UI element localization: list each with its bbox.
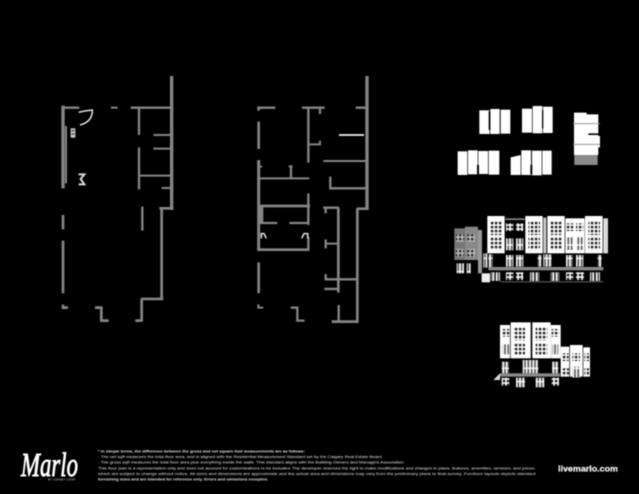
logo — [20, 447, 78, 484]
door swing — [79, 110, 92, 125]
floor plan: right unit — [257, 76, 369, 322]
door swings — [261, 234, 308, 238]
disclaimer text: - The net sqft measures the total floor area, and is aligned with the Residential Measurement Standard set by the Calgary Real Estate Board. — [98, 455, 383, 459]
disclaimer text: which are subject to change without notice. All sizes and dimensions are approximate and the actual area and dimensions may vary from the preliminary plans to final survey. Furniture layouts depicts standard — [98, 472, 536, 476]
large windows — [490, 221, 600, 250]
disclaimer text: - The gross sqft measures the total floor area plus everything inside the walls. This standard aligns with the Building Owners and Managers Association. — [98, 460, 405, 464]
lower windows — [491, 272, 600, 281]
massing: block B — [522, 106, 553, 133]
website url: livemarlo.com — [558, 464, 618, 474]
disclaimer text: This floor plan is a representation only and does not account for customizations to be included. The developer reserves the right to make modifications and changes to plans, features, amenities, services, and prices, — [98, 466, 536, 470]
disclaimer text — [98, 450, 536, 482]
disclaimer text: furnishing sizes and are intended for reference only. Errors and omissions excepted. — [98, 478, 268, 482]
icon: stair symbol — [79, 174, 84, 184]
lower square windows — [506, 272, 584, 280]
white facade panels — [487, 216, 608, 253]
neighbouring grey building — [454, 227, 482, 273]
disclaimer text: * In simple terms, the difference between the gross and net square foot measurements are as follows: — [98, 450, 305, 454]
massing: side block — [573, 113, 600, 165]
elevation: short street front — [493, 322, 590, 387]
logo tagline: BY CIDNEY LOOP — [48, 478, 75, 482]
podium band — [482, 267, 603, 282]
tall windows — [502, 344, 580, 387]
elevation: long street front — [454, 216, 608, 282]
icon: fixture — [71, 128, 75, 138]
massing thumbnails — [458, 106, 600, 175]
floor plan: left unit — [62, 76, 173, 322]
windows with grid — [502, 328, 589, 386]
white facade panels — [500, 322, 590, 377]
massing: block A — [479, 109, 510, 134]
massing: block D — [511, 150, 552, 175]
podium band and ramp — [493, 373, 560, 380]
logo wordmark: Marlo — [20, 447, 78, 484]
tall and ground windows — [483, 237, 602, 268]
massing: block C — [458, 150, 499, 175]
